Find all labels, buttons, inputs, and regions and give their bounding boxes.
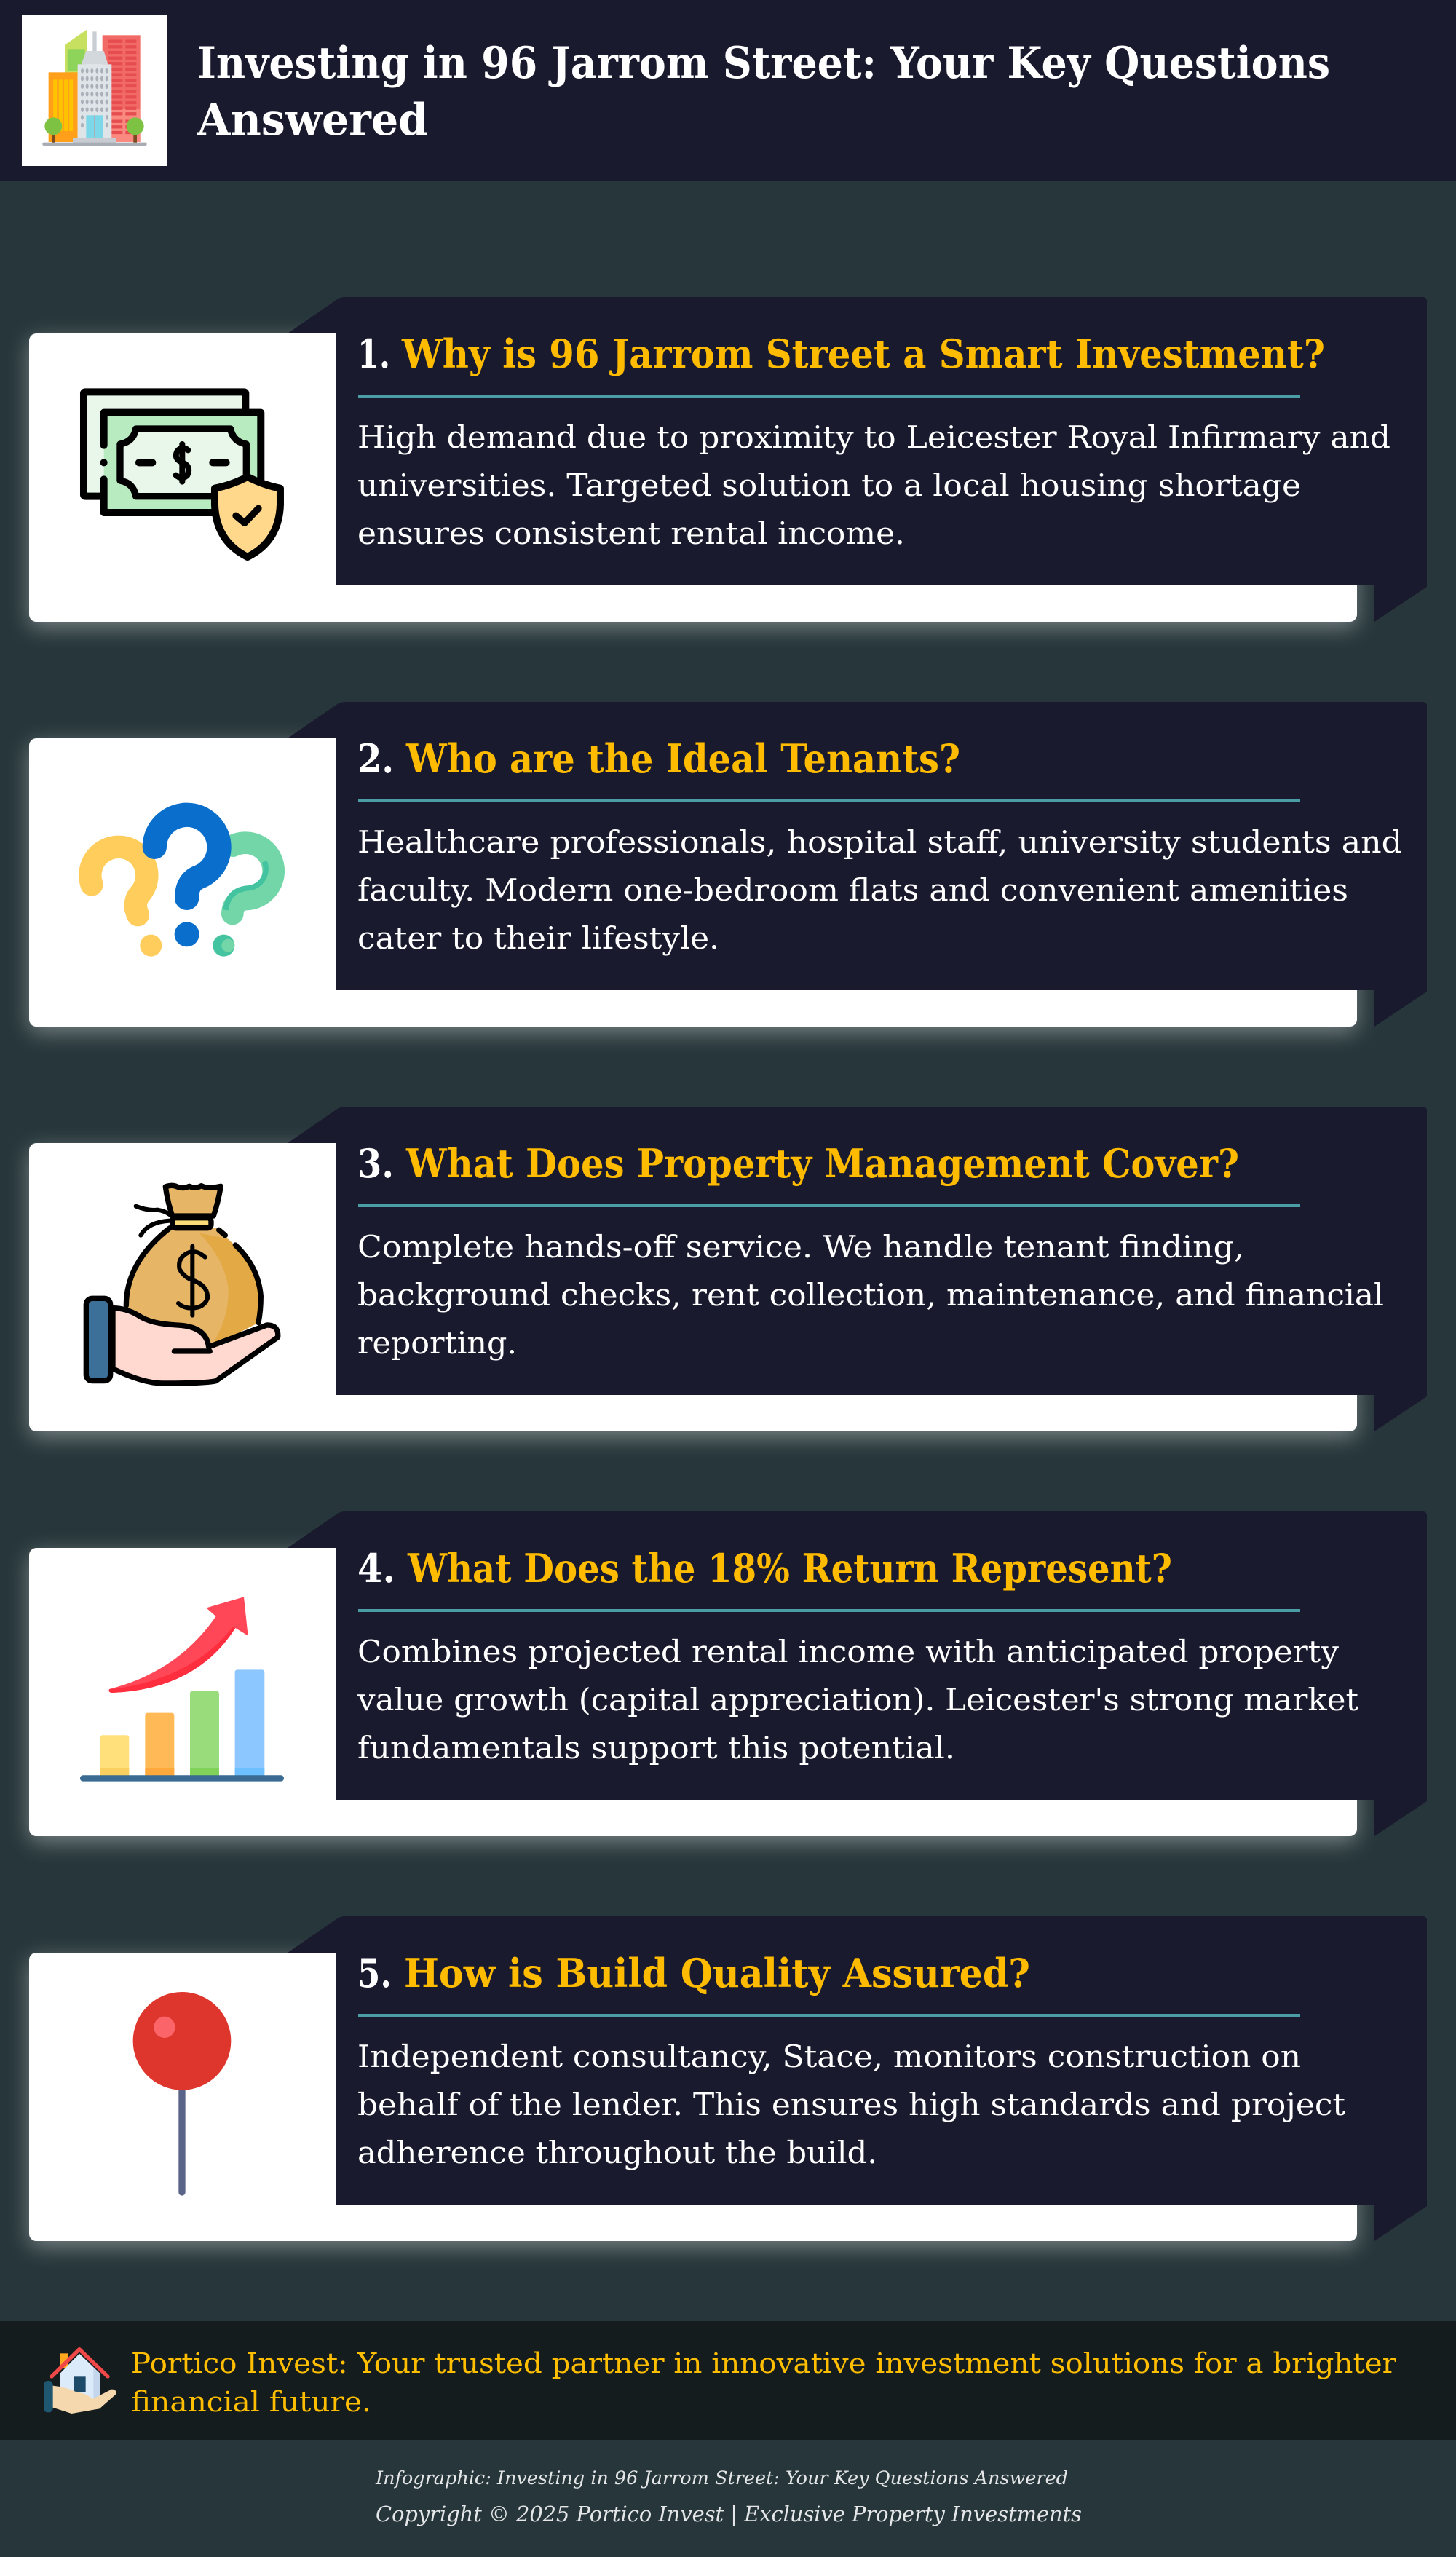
heading: 5. (357, 1950, 392, 1996)
body text: Complete hands-off service. We handle tenant finding, (357, 1229, 1244, 1265)
heading: 1. (357, 331, 390, 377)
body text: ensures consistent rental income. (357, 515, 905, 551)
body text: fundamentals support this potential. (357, 1730, 955, 1766)
heading: Why is 96 Jarrom Street a Smart Investment? (401, 331, 1325, 377)
body text (357, 419, 1390, 551)
footer credits: Infographic: Investing in 96 Jarrom Street: Your Key Questions Answered (375, 2467, 1068, 2489)
heading: What Does Property Management Cover? (405, 1140, 1239, 1187)
header (0, 0, 1456, 181)
title: Investing in 96 Jarrom Street: Your Key Questions (197, 38, 1330, 89)
icon: city buildings logo (22, 15, 167, 166)
callout band: Portico Invest (0, 2321, 1456, 2440)
heading: What Does the 18% Return Represent? (407, 1545, 1172, 1592)
body text (357, 1229, 1384, 1361)
title: Answered (197, 95, 428, 146)
heading: 3. (357, 1140, 394, 1187)
panel: question 3 (29, 1107, 1427, 1437)
body text: High demand due to proximity to Leicester Royal Infirmary and (357, 419, 1390, 455)
heading: How is Build Quality Assured? (404, 1950, 1030, 1996)
footer credits: Copyright © 2025 Portico Invest | Exclusive Property Investments (376, 2502, 1082, 2526)
body text: Healthcare professionals, hospital staff, university students and (357, 824, 1402, 860)
body text: cater to their lifestyle. (357, 920, 719, 956)
icon: banknotes with shield (84, 392, 280, 557)
body text (357, 824, 1402, 956)
panel: question 2 (29, 702, 1427, 1032)
icon: house in hand (44, 2349, 116, 2414)
body text (357, 2039, 1345, 2170)
body text: Independent consultancy, Stace, monitors construction on (357, 2039, 1301, 2074)
panel: question 5 (29, 1916, 1427, 2247)
body text: reporting. (357, 1325, 517, 1361)
icon: rising bar chart with arrow (80, 1597, 284, 1782)
body text: adherence throughout the build. (357, 2135, 877, 2170)
title (197, 38, 1330, 146)
body text: Combines projected rental income with anticipated property (357, 1634, 1339, 1669)
body text: behalf of the lender. This ensures high standards and project (357, 2087, 1345, 2122)
body text: universities. Targeted solution to a local housing shortage (357, 467, 1301, 503)
body text (357, 1634, 1358, 1766)
footer credits (375, 2467, 1082, 2526)
callout text: Portico Invest: Your trusted partner in innovative investment solutions for a brighter (131, 2347, 1397, 2379)
panel: question 4 (29, 1511, 1427, 1842)
heading: 2. (357, 735, 394, 782)
icon: money bag in hand (86, 1185, 278, 1383)
heading: Who are the Ideal Tenants? (405, 735, 960, 782)
body text: value growth (capital appreciation). Leicester's strong market (357, 1682, 1358, 1718)
panel: question 1 (29, 297, 1427, 628)
icon: question marks (90, 815, 274, 957)
body text: faculty. Modern one-bedroom flats and convenient amenities (357, 872, 1348, 908)
callout text: financial future. (131, 2386, 371, 2418)
callout text (131, 2347, 1397, 2418)
heading: 4. (357, 1545, 395, 1592)
icon: red pin (133, 1992, 231, 2196)
body text: background checks, rent collection, maintenance, and financial (357, 1277, 1384, 1313)
